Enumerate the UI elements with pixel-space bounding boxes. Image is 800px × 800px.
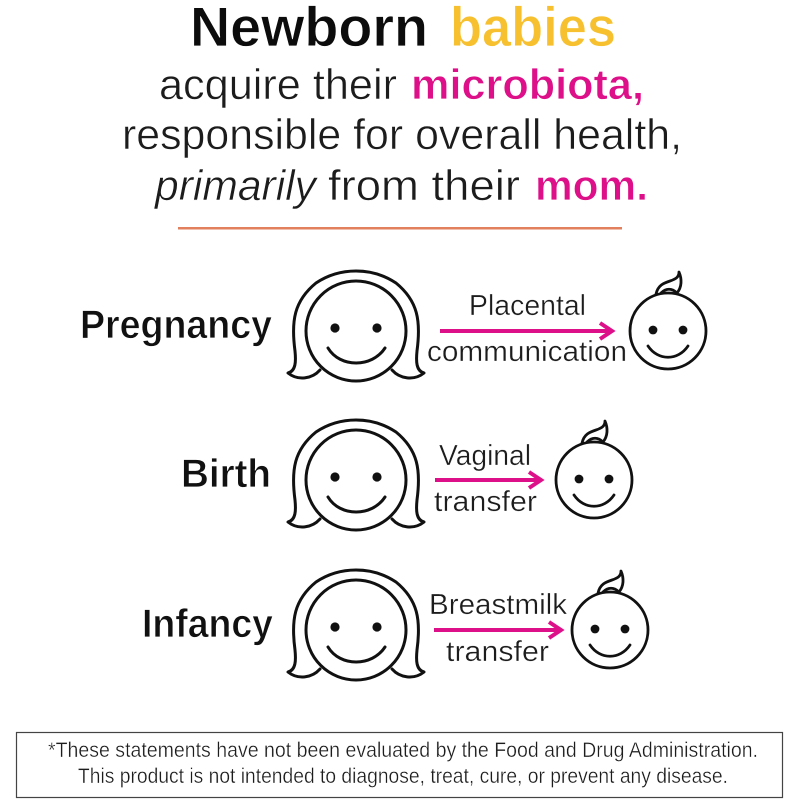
label: Pregnancy: Pregnancy [80, 303, 273, 347]
label: Infancy: Infancy [142, 602, 274, 646]
label: breastmilk: Breastmilk [429, 589, 568, 621]
icon: mother [288, 271, 424, 381]
icon: baby [556, 421, 632, 518]
disclaimer box [16, 732, 782, 798]
icon: baby [630, 272, 706, 369]
arrow [435, 472, 541, 488]
icon: mother [288, 570, 424, 680]
icon: mother [288, 420, 424, 530]
arrow [440, 323, 612, 339]
line: primarily: primarily [153, 162, 318, 210]
line: microbiota: microbiota, [411, 61, 644, 109]
row: pregnancy [80, 271, 706, 381]
row: infancy [142, 570, 648, 680]
arrow [434, 622, 561, 638]
line: acquire their: acquire their [159, 61, 397, 109]
label: transfer: transfer [434, 486, 537, 518]
line: responsible for overall health: responsible for overall health, [122, 111, 682, 159]
line: from their: from their [328, 162, 520, 210]
label: placental: Placental [469, 290, 586, 322]
title [122, 0, 682, 210]
disclaimer box: *These statements have not been evaluated by the Food and Drug Administration. [48, 739, 758, 762]
label: transfer: transfer [446, 636, 549, 668]
row: birth [181, 420, 632, 530]
label: communication: communication [427, 336, 627, 368]
label: Birth: Birth [181, 452, 271, 496]
icon: baby [572, 571, 648, 668]
label: vaginal: Vaginal [439, 440, 531, 472]
line: mom: mom. [535, 162, 648, 210]
disclaimer box: This product is not intended to diagnose, treat, cure, or prevent any disease. [78, 765, 728, 788]
